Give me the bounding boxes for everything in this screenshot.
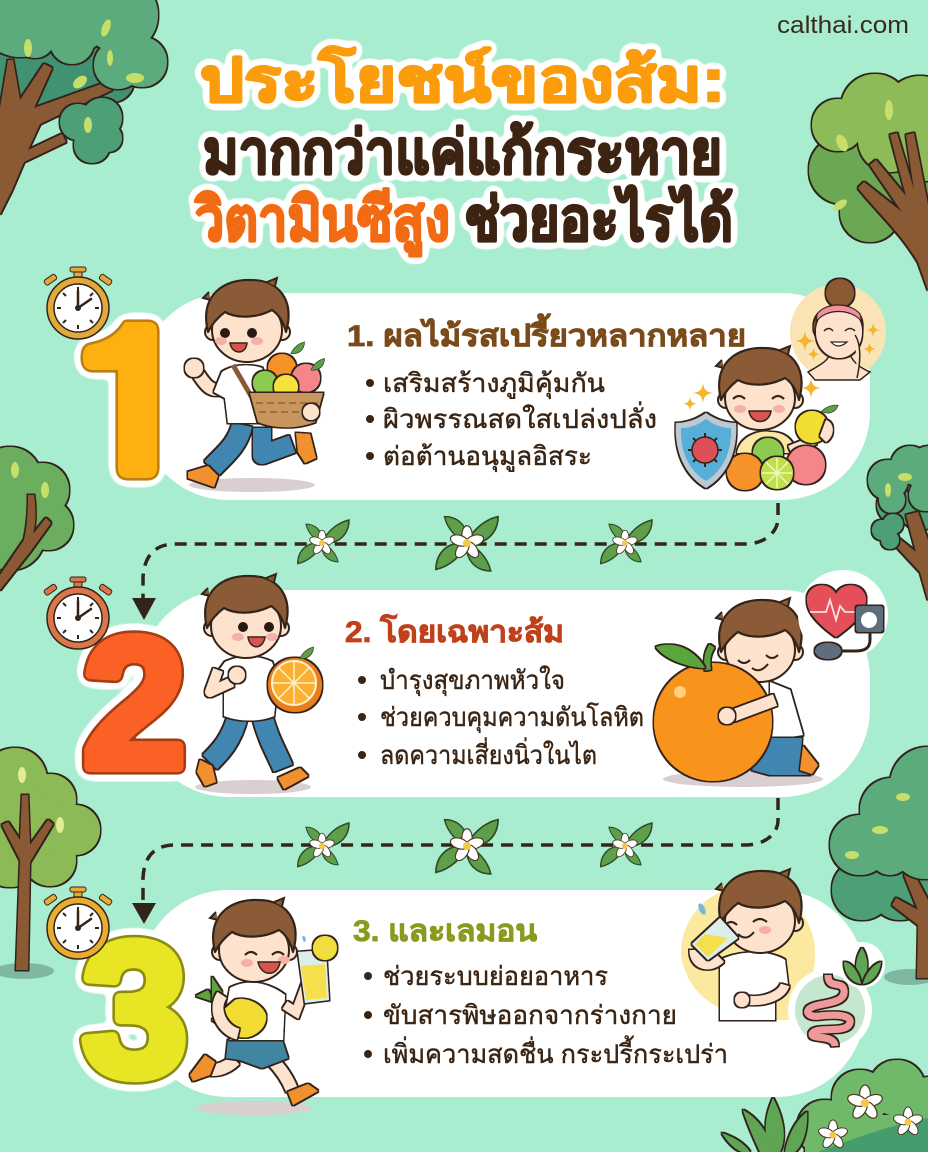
step 1 bullets: ผิวพรรณสดใสเปล่งปลั่ง [383,401,657,434]
panel: step 2 card [140,590,870,797]
tree: top left [0,0,167,214]
tree: lower right [830,747,928,985]
icon: heart and blood pressure monitor [798,570,888,660]
tree: lower left [0,748,100,979]
panel: step 3 card [140,890,865,1097]
step 1 bullets [366,368,657,472]
watermark: calthai.com [777,12,909,39]
icon: stopwatch 3 [43,887,113,959]
step 2 bullets: ช่วยควบคุมความดันโลหิต [380,702,644,733]
icon: stopwatch 2 [43,577,113,649]
number 2: 2 [83,601,186,807]
connector: step 2 to 3 [132,798,778,924]
icon: woman glowing skin [790,279,886,380]
flowers on connector 1 [298,517,652,571]
title line 3: วิตามินซีสูง ช่วยอะไรได้ [194,184,733,257]
step 3 bullets [364,961,728,1069]
icon: stopwatch 1 [43,267,113,339]
title [194,45,733,257]
number 1 [74,312,166,488]
number 3: 3 [82,904,188,1116]
connector: step 1 to 2 [132,503,778,620]
title line 2: มากกว่าแค่แก้กระหาย [203,119,722,186]
flowers on connector 2 [298,820,652,874]
boy 3 running with lemon and juice [190,898,337,1115]
icon: herb leaves [839,942,885,988]
step 1 heading: 1. ผลไม้รสเปรี้ยวหลากหลาย [347,313,746,353]
step 2 bullets: บำรุงสุขภาพหัวใจ [380,665,565,696]
boy 2 walking with orange [195,574,322,794]
panel: step 1 card [140,293,870,500]
step 3 heading: 3. และเลมอน [353,915,538,948]
step 2 bullets: ลดความเสี่ยงนิ่วในไต [380,737,597,770]
icon: digestive system [788,968,872,1052]
boy 2 hugging giant orange [654,598,823,787]
tree: top right [809,74,928,290]
step 3 bullets: เพิ่มความสดชื่น กระปรี้กระเปร่า [383,1035,728,1069]
title line 1: ประโยชน์ของส้ม: [200,45,725,114]
number 1: 1 [79,279,201,525]
step 1 bullets: ต่อต้านอนุมูลอิสระ [383,441,592,472]
tree: middle right [868,446,928,600]
step 2 heading: 2. โดยเฉพาะส้ม [345,613,564,649]
step 3 bullets: ขับสารพิษออกจากร่างกาย [383,1000,677,1030]
boy 3 drinking juice [681,869,815,1020]
boy 1 running with fruit basket [185,278,324,492]
step 3 bullets: ช่วยระบบย่อยอาหาร [383,961,608,991]
step 1 bullets: เสริมสร้างภูมิคุ้มกัน [383,368,605,399]
bush: bottom right [722,1060,928,1152]
tree: middle left [0,447,73,590]
boy 1 with shield and fruits [676,346,838,490]
step 2 bullets [358,665,644,770]
